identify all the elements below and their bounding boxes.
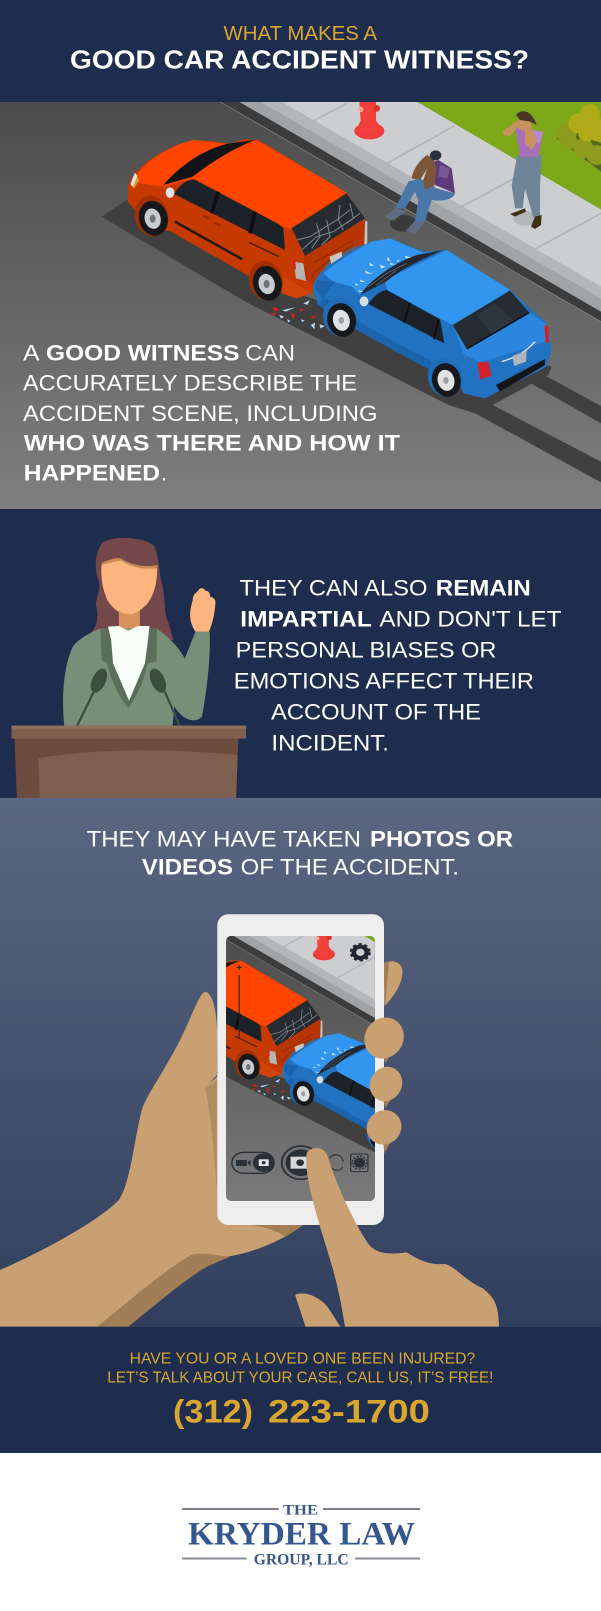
illustration: woman testifying at podium	[11, 538, 246, 798]
icon: video/photo toggle	[232, 1152, 274, 1173]
header band	[0, 0, 601, 102]
hand: palm and thumb	[0, 961, 403, 1327]
hand: fingers	[360, 1014, 408, 1153]
heading: what makes a: WHAT MAKES A	[224, 23, 378, 45]
text: a good witness	[23, 341, 401, 486]
camera controls	[232, 944, 499, 1327]
text: remain impartial: ACCOUNT OF THE	[271, 699, 481, 724]
panel: call to action	[0, 1327, 601, 1453]
text: a good witness: WHO WAS THERE AND HOW IT	[24, 431, 401, 456]
text: remain impartial: AND DON'T LET	[379, 607, 562, 632]
illustration: hand holding phone	[0, 914, 501, 1327]
phone body	[217, 914, 384, 1225]
panel: photos or videos	[0, 798, 601, 1327]
camera focus guide	[236, 965, 242, 1038]
text: a good witness: ACCIDENT SCENE, INCLUDING	[23, 401, 377, 426]
text: a good witness: GOOD WITNESS	[46, 341, 240, 366]
text: remain impartial: EMOTIONS AFFECT THEIR	[234, 668, 534, 693]
text: a good witness: ACCURATELY DESCRIBE THE	[23, 371, 357, 396]
text: remain impartial: REMAIN	[436, 576, 531, 601]
text: a good witness: A	[23, 341, 40, 366]
logo: the kryder law group: THE	[283, 1502, 318, 1518]
text: remain impartial: PERSONAL BIASES OR	[236, 638, 496, 663]
text: phone number	[173, 1393, 430, 1429]
logo: the kryder law group	[182, 1502, 420, 1568]
illustration: standing woman with hands on head	[503, 111, 543, 229]
hand: pointing finger	[306, 1148, 499, 1327]
logo: the kryder law group: GROUP, LLC	[254, 1551, 349, 1568]
text: remain impartial: INCIDENT.	[271, 731, 389, 756]
icon: flip camera	[330, 1155, 343, 1170]
text: photos or videos	[87, 827, 513, 879]
text: photos or videos: THEY MAY HAVE TAKEN	[87, 827, 361, 852]
text: injured question: HAVE YOU OR A LOVED ONE BEEN INJURED?	[130, 1350, 475, 1367]
text: a good witness: .	[161, 461, 167, 486]
icon: flash box	[351, 1154, 368, 1172]
text: photos or videos: VIDEOS	[142, 854, 233, 879]
text: remain impartial: THEY CAN ALSO	[240, 576, 427, 601]
text: free call: LET’S TALK ABOUT YOUR CASE, CALL US, IT’S FREE!	[107, 1369, 493, 1386]
text: photos or videos: PHOTOS OR	[370, 827, 513, 852]
icon: shutter button	[282, 1146, 320, 1179]
text: remain impartial: IMPARTIAL	[240, 607, 372, 632]
heading: good car accident witness: GOOD CAR ACCIDENT WITNESS?	[70, 44, 529, 74]
panel: impartial witness	[0, 509, 601, 798]
illustration: road, sidewalk and crashed cars	[0, 102, 601, 509]
text: remain impartial	[234, 576, 562, 756]
text: a good witness: CAN	[245, 341, 295, 366]
text: phone number: (312)	[173, 1393, 253, 1429]
icon: settings gear	[351, 944, 370, 961]
phone screen with accident photo	[226, 936, 375, 1201]
panel: accident scene	[0, 102, 601, 509]
logo: the kryder law group: KRYDER LAW	[188, 1516, 415, 1552]
text: phone number: 223-1700	[268, 1393, 430, 1429]
text: a good witness: HAPPENED	[24, 461, 160, 486]
illustration: sitting man with head in hands	[384, 150, 455, 234]
text: photos or videos: OF THE ACCIDENT.	[241, 854, 459, 879]
hand: curled finger	[295, 1293, 340, 1327]
